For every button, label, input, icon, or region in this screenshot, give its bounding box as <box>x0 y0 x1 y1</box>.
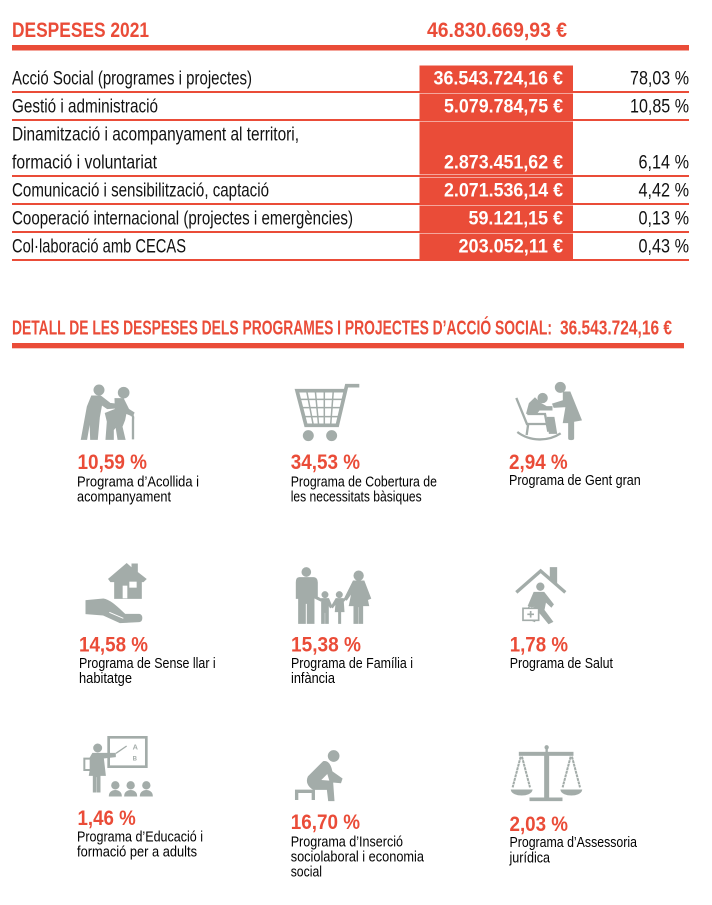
item: Acollida: 10,59 % <box>78 450 147 474</box>
icon: doctor on home visit <box>516 568 565 624</box>
row: Comunicació: Comunicació i sensibilització, captació <box>12 180 269 202</box>
icon: scales of justice <box>511 746 582 801</box>
item: Sense llar <box>79 564 216 687</box>
item: Gent gran: 2,94 % <box>509 450 568 474</box>
icon: carer with person in rocking chair <box>516 382 581 440</box>
row: Gestió i administració: Gestió i administració <box>12 96 158 118</box>
row: Gestió i administració: 5.079.784,75 € <box>444 96 563 118</box>
item: Assessoria jurídica <box>509 746 638 866</box>
row: Dinamització: Dinamització i acompanyament al territori, <box>12 124 299 146</box>
icon: shopping cart <box>297 386 359 441</box>
row: Col·laboració amb CECAS <box>12 234 689 261</box>
item: Cobertura: Programa de Cobertura de <box>291 474 437 490</box>
icon: teacher with blackboard and students: A <box>133 742 139 751</box>
row: Col·laboració amb CECAS: 0,43 % <box>638 236 689 258</box>
row: Dinamització: formació i voluntariat <box>12 152 157 174</box>
item: Gent gran: Programa de Gent gran <box>509 473 641 489</box>
icon: teacher with blackboard and students: B <box>133 757 138 763</box>
item: Família: Programa de Família i <box>291 656 413 672</box>
item: Acollida <box>77 385 199 506</box>
item: Salut: 1,78 % <box>510 633 568 657</box>
item: Inserció <box>291 751 425 880</box>
row: Dinamització <box>12 122 689 177</box>
item: Inserció: social <box>291 864 322 880</box>
row: Dinamització: 6,14 % <box>638 152 689 174</box>
item: Sense llar: Programa de Sense llar i <box>79 656 216 672</box>
item: Assessoria jurídica: jurídica <box>509 850 551 866</box>
row: Gestió i administració: 10,85 % <box>630 96 689 118</box>
icon: elderly person helped by carer <box>81 385 134 439</box>
row: Col·laboració amb CECAS: 203.052,11 € <box>458 236 563 258</box>
row: Comunicació: 2.071.536,14 € <box>444 180 563 202</box>
item: Cobertura: les necessitats bàsiques <box>291 490 422 506</box>
item: Família: infància <box>291 671 336 687</box>
heading: detail of social action programmes <box>12 316 684 348</box>
row: Comunicació: 4,42 % <box>638 180 689 202</box>
item: Assessoria jurídica: Programa d’Assessoria <box>510 835 638 851</box>
icon: family <box>296 568 371 623</box>
item: Cobertura <box>291 386 437 506</box>
heading: detail of social action programmes: 36.543.724,16 € <box>560 318 672 340</box>
row: Col·laboració amb CECAS: Col·laboració amb CECAS <box>12 236 186 258</box>
icon: teacher with blackboard and students <box>84 737 152 796</box>
item: Inserció: 16,70 % <box>291 810 360 834</box>
item: Educació: Programa d’Educació i <box>77 830 203 846</box>
row: Cooperació internacional: Cooperació internacional (projectes i emergències) <box>12 208 353 230</box>
item: Inserció: sociolaboral i economia <box>291 850 425 866</box>
item: Salut <box>510 568 613 672</box>
item: Inserció: Programa d’Inserció <box>291 834 403 850</box>
row: Dinamització: 2.873.451,62 € <box>444 152 563 174</box>
row: Cooperació internacional: 59.121,15 € <box>468 208 563 230</box>
item: Sense llar: 14,58 % <box>79 633 148 657</box>
item: Salut: Programa de Salut <box>510 656 613 672</box>
header: total expenses: 46.830.669,93 € <box>427 19 567 42</box>
item: Família: 15,38 % <box>291 633 361 657</box>
row: Gestió i administració <box>12 94 689 121</box>
item: Gent gran <box>509 382 641 489</box>
header: total expenses <box>12 19 689 50</box>
row: Acció Social: 78,03 % <box>630 68 689 90</box>
row: Comunicació <box>12 178 689 205</box>
row: Acció Social: 36.543.724,16 € <box>434 68 563 90</box>
item: Educació: 1,46 % <box>78 806 136 830</box>
item: Educació: formació per a adults <box>77 844 197 860</box>
row: Cooperació internacional: 0,13 % <box>638 208 689 230</box>
row: Cooperació internacional <box>12 206 689 233</box>
header: total expenses: DESPESES 2021 <box>12 19 149 42</box>
icon: person sitting hunched <box>297 751 342 801</box>
item: Cobertura: 34,53 % <box>291 450 360 474</box>
row: Acció Social <box>12 66 689 93</box>
row: Acció Social: Acció Social (programes i projectes) <box>12 68 252 90</box>
expenses table <box>12 66 689 261</box>
item: Educació <box>77 737 203 860</box>
item: Acollida: acompanyament <box>77 490 171 506</box>
icon: hand holding house <box>86 564 146 623</box>
item: Assessoria jurídica: 2,03 % <box>510 812 568 836</box>
item: Acollida: Programa d’Acollida i <box>77 474 199 490</box>
item: Sense llar: habitatge <box>79 671 132 687</box>
item: Família <box>291 568 413 687</box>
